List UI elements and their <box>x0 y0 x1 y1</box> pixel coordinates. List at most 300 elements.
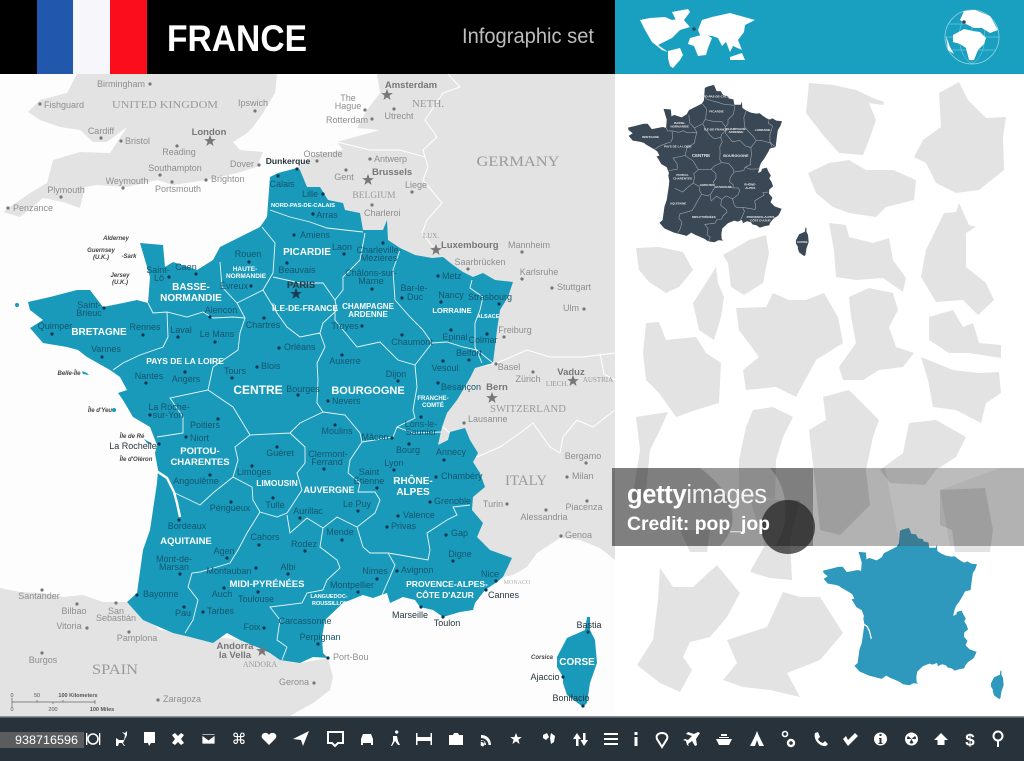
French city labels: Avignon <box>401 565 433 575</box>
country and sea labels: ITALY <box>505 473 547 489</box>
French city labels: Ajaccio <box>530 672 560 682</box>
French city labels: Beauvais <box>278 265 316 275</box>
region name labels: AUVERGNE <box>303 485 355 495</box>
icon: car <box>361 734 373 745</box>
icon: rss <box>481 735 491 746</box>
dark map region names: CHAMPAGNE <box>726 127 746 131</box>
dark France map <box>628 85 809 256</box>
foreign city labels: Rotterdam <box>326 115 368 125</box>
region name labels: FRANCHE- <box>417 396 449 402</box>
French city labels: sur-Yon <box>153 410 183 420</box>
watermark band <box>612 468 1024 554</box>
region shape: Nord-Est <box>929 310 1001 358</box>
region name labels: PAYS DE LA LOIRE <box>146 356 224 366</box>
region shape: Bourgogne <box>914 82 1006 193</box>
French city labels: Bonifacio <box>552 693 590 703</box>
country and sea labels: SPAIN <box>92 662 138 678</box>
foreign city labels: Port-Bou <box>333 652 369 662</box>
foreign city labels: Basel <box>498 362 520 372</box>
dark map region names: LIMOUSIN <box>700 183 714 187</box>
French city labels: Lille <box>302 189 318 199</box>
French city labels: Charleville- <box>356 245 402 255</box>
region shape: small fragment <box>680 530 710 552</box>
French city labels: Nevers <box>332 396 361 406</box>
header: locator band <box>615 0 1024 74</box>
Paris star <box>290 288 302 299</box>
French city labels: Le Puy <box>343 499 372 509</box>
region shape: Poitou-Charentes <box>880 420 966 485</box>
French city labels: Pau <box>175 608 191 618</box>
French city labels: Digne <box>448 549 472 559</box>
French city labels: Troyes <box>331 321 359 331</box>
icon: pin outline <box>994 732 1002 747</box>
foreign city labels: Gent <box>334 172 354 182</box>
foreign city labels <box>13 79 603 704</box>
icon: French flag <box>37 0 147 74</box>
French city labels: Tarbes <box>207 606 235 616</box>
country and sea labels: LUX. <box>423 232 439 240</box>
country and sea labels: SWITZERLAND <box>490 404 566 415</box>
foreign city labels: Cardiff <box>88 126 115 136</box>
icon: dollar sign: $ <box>965 730 975 750</box>
French city labels: Duc <box>407 292 424 302</box>
region name labels: ROUSSILLON <box>312 601 348 607</box>
icon: fork and plate <box>86 733 100 745</box>
region shape: Picardie <box>940 488 993 552</box>
French city labels: Évreux <box>220 281 249 291</box>
country and sea labels: ANDORA <box>243 660 277 669</box>
foreign city labels: la Vella <box>219 650 252 661</box>
French city labels: Carcassonne <box>278 616 332 626</box>
region name labels: COMTÉ <box>422 401 444 409</box>
region name labels: POITOU- <box>180 446 220 457</box>
French city labels: Saint <box>359 467 380 477</box>
foreign city labels: Pamplona <box>117 633 157 643</box>
region shape: Ile-de-France <box>636 247 693 293</box>
region name labels: ÎLE-DE-FRANCE <box>271 302 338 313</box>
icon: info circle <box>874 733 887 746</box>
icon: airplane <box>683 732 700 746</box>
region name labels: NORMANDIE <box>226 273 267 280</box>
icon: globe <box>945 10 999 64</box>
region name labels: LORRAINE <box>432 306 472 315</box>
French city labels: Rouen <box>235 249 261 259</box>
region shape: Rhone-Alpes <box>809 390 879 535</box>
dark map region names: PROVENCE-ALPES- <box>747 215 775 219</box>
French city labels: Laon <box>332 242 352 252</box>
foreign city labels: Portsmouth <box>155 184 201 194</box>
country and sea labels: BELGIUM <box>352 191 396 201</box>
foreign city labels: Lausanne <box>468 414 508 424</box>
icon: paper plane <box>293 731 309 746</box>
dark map region names: MIDI-PYRÉNÉES <box>692 214 716 219</box>
region name labels: BASSE- <box>172 282 210 293</box>
region shape: Pays de la Loire <box>643 322 721 417</box>
French city labels: Lons-le- <box>405 419 437 429</box>
French city labels: Alencon <box>205 305 237 315</box>
French city labels: Rodez <box>291 539 318 549</box>
French city labels: Périgueux <box>210 503 251 513</box>
French city labels: Clermont- <box>308 449 348 459</box>
foreign city labels: Plymouth <box>47 185 85 195</box>
island labels: (U.K.) <box>112 280 128 286</box>
French city labels: Saint- <box>146 265 170 275</box>
icon: check mark <box>843 733 858 746</box>
region name labels: CÔTE D'AZUR <box>416 589 474 600</box>
dark map region names <box>642 94 808 244</box>
foreign city labels: Charleroi <box>364 208 401 218</box>
region name labels: ALSACE <box>477 314 500 320</box>
foreign city labels: Piacenza <box>565 502 603 512</box>
foreign city labels: Penzance <box>13 203 53 213</box>
region name labels: LIMOUSIN <box>256 478 298 488</box>
island labels: Île de Ré <box>120 433 145 440</box>
land: United Kingdom <box>3 74 277 217</box>
French city labels: Mende <box>326 527 354 537</box>
icon: up and down arrows <box>573 733 588 746</box>
French city labels: Chartres <box>246 320 281 330</box>
foreign city labels: Burgos <box>29 655 58 665</box>
foreign city labels: Gerona <box>279 677 309 687</box>
dark map region names: BRETAGNE <box>642 135 659 139</box>
region shape: Auvergne <box>839 288 914 380</box>
foreign city dots <box>8 84 587 700</box>
foreign city labels: Amsterdam <box>385 80 437 91</box>
dark map region names: ARDENNE <box>729 130 743 134</box>
French city labels: Chaumont <box>391 337 433 347</box>
dark map region names: CHARENTES <box>673 176 692 180</box>
region name labels <box>71 203 595 668</box>
French city labels: Metz <box>442 271 462 281</box>
foreign city labels: Saarbrücken <box>454 257 506 267</box>
icon: ship <box>716 734 732 745</box>
country and sea labels: LIECH. <box>546 380 568 388</box>
region name labels: PICARDIE <box>283 247 331 258</box>
foreign city labels: Reading <box>162 147 196 157</box>
island labels: Île d'Oléron <box>120 456 153 463</box>
French city labels: Foix <box>243 622 261 632</box>
foreign city labels: Zaragoza <box>163 694 201 704</box>
island labels: (U.K.) <box>93 255 109 261</box>
foreign city labels: Bergamo <box>565 451 601 461</box>
foreign city labels: Ulm <box>563 303 579 313</box>
watermark logo: gettyimages <box>627 481 767 509</box>
region name labels: CENTRE <box>233 383 283 397</box>
region name labels: HAUTE- <box>233 266 257 273</box>
dark map region names: AUVERGNE <box>715 185 732 189</box>
French city labels: Montauban <box>206 566 252 576</box>
French city labels: Privas <box>391 521 417 531</box>
icon: menu lines <box>604 733 618 745</box>
French city labels: Lô <box>154 273 164 283</box>
foreign city labels: Vitoria <box>56 621 82 631</box>
blue France map <box>823 528 1004 699</box>
French city labels: Quimper <box>38 321 72 331</box>
French city labels: Arras <box>316 210 338 220</box>
French city labels: Nancy <box>438 290 464 300</box>
French city labels: Bar-le- <box>400 283 428 293</box>
foreign city labels: Bern <box>486 382 508 393</box>
dark map region names: NORMANDIE <box>670 124 689 128</box>
French city labels: Guéret <box>266 448 294 458</box>
island labels: Alderney <box>102 236 129 242</box>
French city labels: Ferrand <box>311 457 343 467</box>
icon: speech marker <box>144 732 155 746</box>
icon: deer <box>116 731 127 746</box>
French city labels: Calais <box>269 179 295 189</box>
French city labels: Marsan <box>159 562 189 572</box>
French city labels: Grenoble <box>434 496 471 506</box>
French city labels: Auch <box>212 589 232 599</box>
foreign city labels: Mannheim <box>508 240 550 250</box>
dark map region names: BOURGOGNE <box>723 154 749 158</box>
region shape: Midi-Pyrenees <box>723 592 843 697</box>
French city labels: Belfort <box>456 348 483 358</box>
French city labels: Auxerre <box>329 356 361 366</box>
French city labels: Moulins <box>321 426 353 436</box>
footer icons <box>86 730 1002 750</box>
region name labels: ALPES <box>396 487 430 498</box>
region name labels: CHARENTES <box>170 457 230 468</box>
scale bar: 200 <box>48 707 58 713</box>
icon: walking person <box>391 730 400 746</box>
French city labels: Bastia <box>576 620 602 630</box>
land: Spain <box>0 588 333 716</box>
region name labels: CHAMPAGNE <box>342 302 395 311</box>
French city labels: Toulon <box>434 618 460 628</box>
foreign city labels: Brussels <box>372 167 412 178</box>
region name labels: NORD-PAS-DE-CALAIS <box>271 203 335 209</box>
small islands <box>15 303 159 462</box>
country and sea labels: MONACO <box>504 580 531 586</box>
dark map region names: AQUITAINE <box>670 201 686 205</box>
icon: command key: ⌘ <box>232 730 246 748</box>
French city labels: Mâcon <box>361 432 389 442</box>
French city labels: Gap <box>451 528 468 538</box>
region shape: Centre <box>736 293 843 397</box>
icon: up arrow <box>934 733 948 745</box>
French city labels: Lyon <box>384 458 404 468</box>
French city labels: Marseille <box>392 610 428 620</box>
French city labels: La Roche- <box>148 402 190 412</box>
dark map region names: BASSE- <box>674 121 685 125</box>
region name labels: RHÔNE- <box>393 474 433 487</box>
French city labels: Laval <box>170 325 192 335</box>
French city labels: PARIS <box>287 280 315 291</box>
foreign city labels: London <box>192 127 227 138</box>
French city labels: Tulle <box>265 500 285 510</box>
region shape: Lorraine <box>921 357 1001 423</box>
region shape: Alsace <box>750 500 800 580</box>
French city dots <box>52 169 588 706</box>
French city labels: Poitiers <box>190 420 221 430</box>
French city labels: Toulouse <box>238 594 274 604</box>
scale bar: 0 <box>10 707 14 713</box>
foreign city labels: Genoa <box>565 530 592 540</box>
foreign city labels: The <box>340 93 356 103</box>
foreign city labels: Zürich <box>515 374 541 384</box>
scale bar: 100 Kilometers <box>58 693 98 699</box>
icon: info i <box>634 732 638 746</box>
island labels: Île d'Yeu <box>88 407 112 414</box>
country and sea labels: UNITED KINGDOM <box>112 99 218 111</box>
French city labels: Aurillac <box>293 506 323 516</box>
country and sea labels <box>92 98 613 678</box>
foreign city labels: Utrecht <box>384 111 414 121</box>
French city labels: Saunier <box>405 427 437 437</box>
French city labels <box>38 156 602 703</box>
French city labels: Brieuc <box>76 308 102 318</box>
French city labels: Tours <box>224 366 246 376</box>
French city labels: Blois <box>261 361 281 371</box>
region shape: Corse <box>693 267 724 340</box>
foreign city labels: Stuttgart <box>557 282 592 292</box>
French city labels: Limoges <box>237 467 272 477</box>
French city labels: Saint- <box>77 300 101 310</box>
foreign city labels: San <box>108 606 124 616</box>
foreign city labels: Vaduz <box>557 367 585 378</box>
French city labels: Bordeaux <box>168 521 207 531</box>
region name labels: PROVENCE-ALPES- <box>406 579 488 589</box>
foreign city labels: Santander <box>18 591 60 601</box>
foreign city labels: Turin <box>483 499 503 509</box>
region shape: Franche-Comte <box>739 407 793 500</box>
foreign city labels: Oostende <box>303 149 343 159</box>
watermark credit: Credit: pop_jop <box>627 514 770 535</box>
French city labels: Amiens <box>300 230 331 240</box>
French city labels: Valence <box>403 510 435 520</box>
foreign city labels: Ipswich <box>238 98 268 108</box>
foreign city labels: Bristol <box>125 136 150 146</box>
island labels: Jersey <box>110 273 130 279</box>
icon: gears <box>782 732 794 746</box>
French city labels: Montpellier <box>330 580 374 590</box>
foreign city labels: Alessandria <box>520 512 568 522</box>
icon: mail <box>202 734 215 744</box>
French city labels: Bayonne <box>143 589 179 599</box>
footer icon bar <box>0 716 1024 761</box>
region shape: Languedoc <box>632 412 668 500</box>
dark map region names: ALPES <box>745 186 755 190</box>
French city labels: Agen <box>213 546 235 556</box>
foreign city labels: Antwerp <box>374 154 407 164</box>
subtitle: Infographic set <box>462 25 594 48</box>
region name labels: NORMANDIE <box>160 293 222 304</box>
foreign city labels: Brighton <box>211 174 245 184</box>
icon: radiation <box>905 733 918 746</box>
French city labels: Mézières <box>361 253 398 263</box>
scale bar: 0 <box>10 693 14 699</box>
French city labels: Rennes <box>129 322 161 332</box>
dark map region names: RHÔNE- <box>744 181 756 186</box>
French city labels: Caen <box>175 262 197 272</box>
region name labels: ARDENNE <box>348 310 388 319</box>
icon: cross <box>172 733 184 745</box>
French city labels: Angers <box>172 374 201 384</box>
France map <box>28 168 597 707</box>
foreign city labels: Bilbao <box>61 606 87 616</box>
icon: map pin <box>657 733 667 747</box>
icon: world map <box>640 9 755 68</box>
French city labels: Dijon <box>386 369 406 379</box>
foreign city labels: Karlsruhe <box>520 267 558 277</box>
foreign city labels: Freiburg <box>498 325 532 335</box>
French city labels: Cannes <box>488 590 520 600</box>
foreign city labels: Andorra <box>217 641 254 652</box>
image id box: 938716596 <box>15 733 78 747</box>
country borders <box>337 74 615 457</box>
French city labels: Châlons-sur- <box>345 268 397 278</box>
country and sea labels: AUSTRIA <box>583 376 613 384</box>
region name labels: AQUITAINE <box>160 536 212 547</box>
foreign city labels: Luxembourg <box>441 240 499 251</box>
French city labels: Epinal <box>442 332 468 342</box>
region name labels: LANGUEDOC- <box>310 594 348 600</box>
region name labels: BOURGOGNE <box>331 385 405 397</box>
dark map region names: NORD-PAS-DE-CALAIS <box>699 94 732 98</box>
region borders <box>113 210 493 660</box>
dark map region names: POITOU- <box>676 173 689 177</box>
panel: region shapes <box>632 82 1006 697</box>
dark map region names: LORRAINE <box>755 128 770 132</box>
French city labels: Albi <box>280 562 296 572</box>
French city labels: Strasbourg <box>468 292 512 302</box>
French city labels: Nantes <box>135 371 164 381</box>
scale bar <box>10 693 114 713</box>
foreign city labels: Fishguard <box>44 100 84 110</box>
foreign city labels: Milan <box>572 471 594 481</box>
icon: speech bubble <box>328 732 343 746</box>
island labels: -Sark <box>121 254 137 260</box>
island labels: Guernsey <box>87 248 115 254</box>
region shape: Aquitaine <box>637 565 740 692</box>
country and sea labels: GERMANY <box>476 154 560 170</box>
dark map region names: CENTRE <box>692 153 710 158</box>
header: title bar <box>0 0 615 74</box>
French city labels: Nice <box>481 569 499 579</box>
French city labels: Bourg <box>396 445 420 455</box>
icon: star <box>510 733 522 744</box>
icon: camera <box>449 733 463 745</box>
scale bar: 100 Miles <box>90 707 114 713</box>
French city labels: Dunkerque <box>266 156 310 166</box>
icon: heart <box>262 733 276 745</box>
French city labels: Marne <box>358 276 384 286</box>
foreign city labels: Birmingham <box>97 79 145 89</box>
icon: globe <box>543 733 555 744</box>
French city labels: Bourges <box>286 384 320 394</box>
foreign city labels: Liege <box>405 180 427 190</box>
French city labels: Perpignan <box>299 632 341 642</box>
foreign city labels: Hague <box>335 101 361 111</box>
land: northern and eastern Europe <box>297 74 615 577</box>
capital stars outside France <box>204 89 579 656</box>
region name labels: CORSE <box>559 657 595 668</box>
dark map region names: PAYS DE LA LOIRE <box>664 144 692 148</box>
French city labels: Colmar <box>468 335 498 345</box>
dark map region names: CORSE <box>797 240 808 244</box>
foreign city labels: Southampton <box>148 163 202 173</box>
French city labels: Cahors <box>250 532 280 542</box>
dark map region names: PICARDIE <box>709 110 724 114</box>
foreign city labels: Dover <box>230 159 254 169</box>
region shape: Nord-Pas-de-Calais <box>806 83 884 155</box>
French city labels: La Rochelle <box>109 441 157 451</box>
region name labels: MIDI-PYRÉNÉES <box>230 579 304 590</box>
French city labels: Nimes <box>362 566 388 576</box>
French city labels: Mont-de- <box>156 554 192 564</box>
country and sea labels: NETH. <box>412 98 444 110</box>
